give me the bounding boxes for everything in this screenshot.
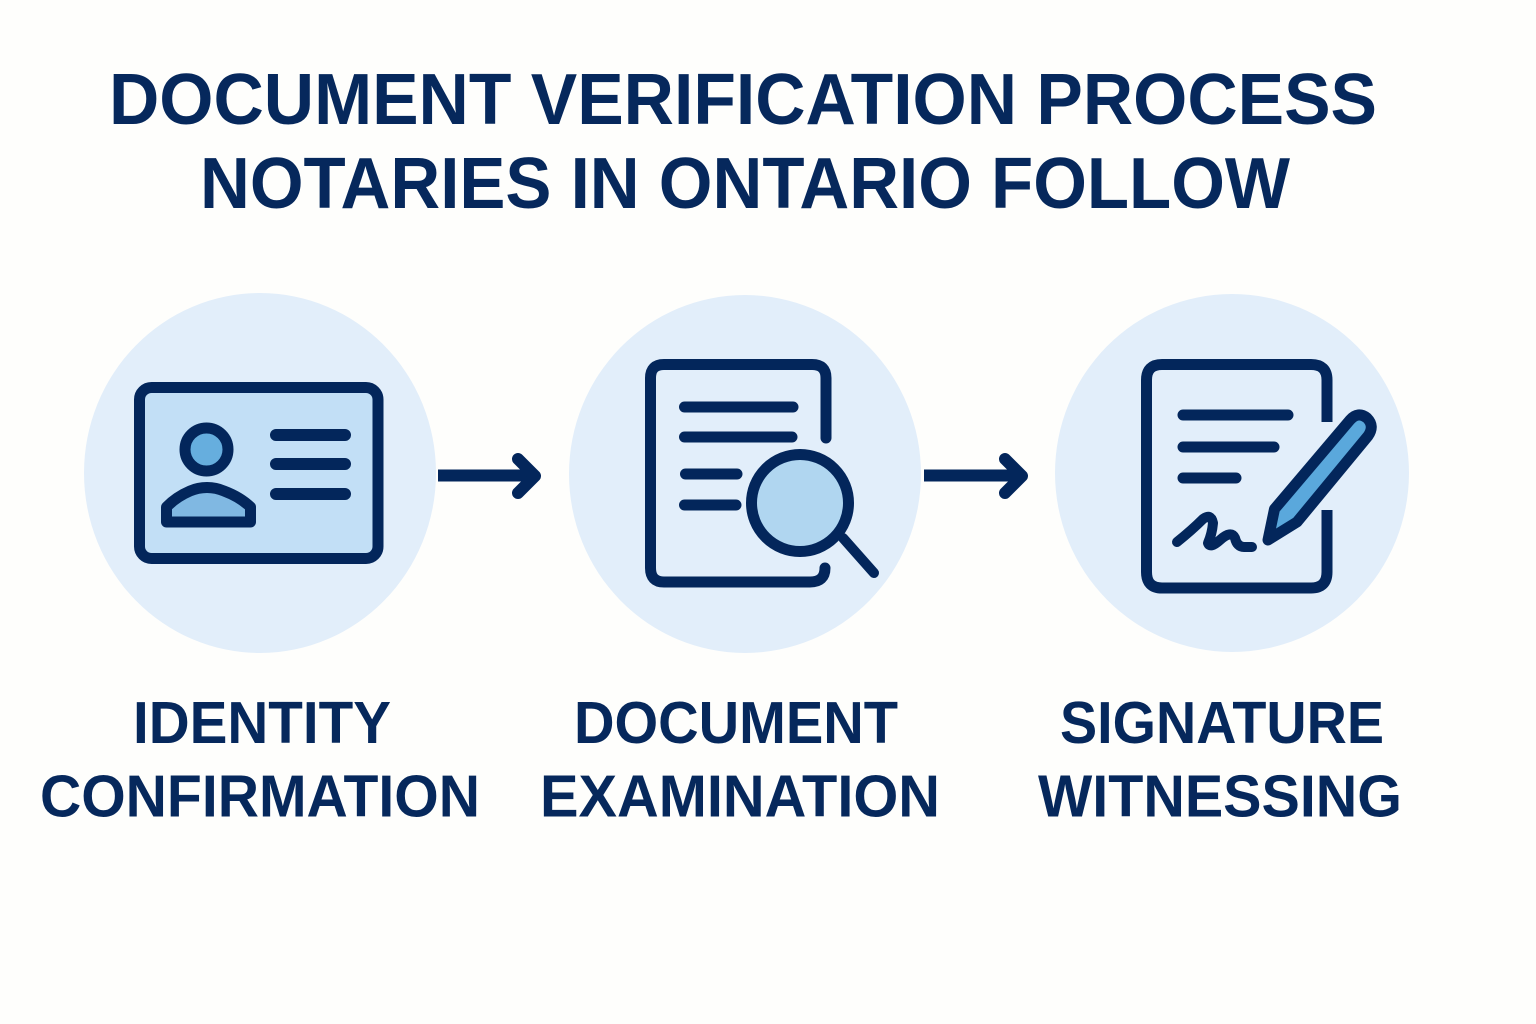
label: document examination: DOCUMENT [574, 690, 898, 756]
panel: identity confirmation [40, 293, 480, 830]
title: NOTARIES IN ONTARIO FOLLOW [200, 144, 1290, 224]
label: signature witnessing [1038, 690, 1402, 830]
arrow: step 2 to step 3 [924, 459, 1022, 493]
arrow: step 1 to step 2 [438, 459, 535, 493]
label: identity confirmation [40, 690, 480, 830]
label: document examination: EXAMINATION [540, 764, 940, 830]
panel: signature witnessing [1038, 294, 1409, 830]
title [109, 60, 1377, 224]
label: signature witnessing: SIGNATURE [1060, 690, 1384, 756]
title: DOCUMENT VERIFICATION PROCESS [109, 60, 1377, 140]
label: document examination [540, 690, 940, 830]
label: identity confirmation: CONFIRMATION [40, 764, 480, 830]
icon background circle [569, 295, 921, 653]
icon background circle [84, 293, 436, 653]
panel: document examination [540, 295, 940, 830]
icon: document with pen [1146, 364, 1371, 588]
icon: document with magnifier [650, 364, 874, 582]
label: signature witnessing: WITNESSING [1038, 764, 1402, 830]
label: identity confirmation: IDENTITY [133, 690, 391, 756]
icon: ID card [140, 388, 378, 558]
icon background circle [1055, 294, 1409, 652]
